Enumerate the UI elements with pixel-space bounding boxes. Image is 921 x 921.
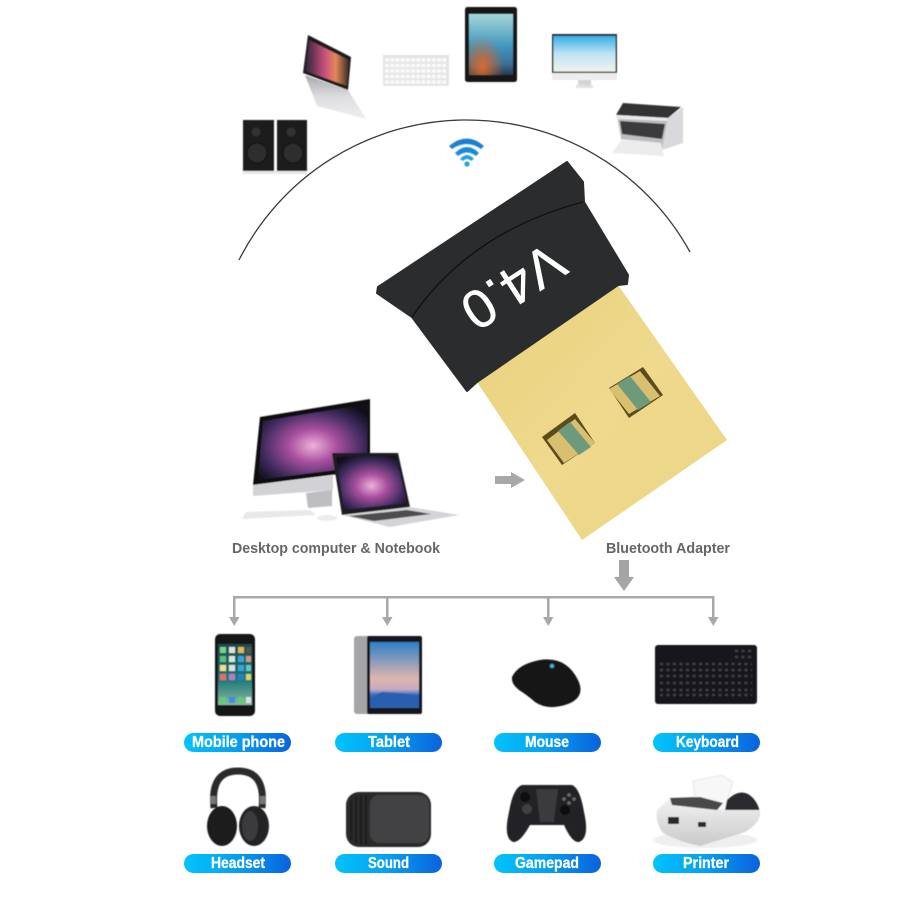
desktop monitor (253, 399, 370, 508)
icon: top printer (612, 103, 683, 156)
device: mobile phone (215, 634, 255, 716)
pill: tablet (335, 733, 442, 752)
pill: mouse: Mouse (525, 734, 569, 751)
icon: speakers (243, 120, 307, 174)
keyboard and mouse (242, 510, 337, 521)
pill: tablet: Tablet (368, 734, 411, 751)
adapter: connector slot left (542, 413, 595, 465)
arrow: computer to adapter (495, 472, 525, 488)
device: mouse (512, 659, 580, 707)
pill: printer (653, 854, 760, 873)
icon: top tablet (465, 7, 517, 82)
pill: gamepad (494, 854, 601, 873)
device: headset (207, 771, 269, 846)
icon: wifi signal (449, 138, 484, 167)
pill: mouse (494, 733, 601, 752)
pill: sound (335, 854, 442, 873)
adapter: version text: V4.0 (450, 231, 576, 341)
pill: headset: Headset (211, 855, 266, 872)
icon: desktop and notebook (242, 399, 459, 527)
device: sound speaker (346, 792, 431, 847)
adapter: black housing (377, 162, 628, 391)
device: tablet (354, 636, 422, 714)
device: portable printer (653, 775, 760, 848)
icon: top monitor (552, 34, 617, 88)
pill: keyboard: Keyboard (676, 734, 739, 751)
adapter: connector slot right (609, 367, 663, 418)
pill: gamepad: Gamepad (515, 855, 579, 872)
icon: top laptop (303, 35, 366, 119)
label: desktop computer and notebook: Desktop computer & Notebook (232, 540, 441, 557)
notebook (332, 453, 459, 527)
pill: headset (184, 854, 291, 873)
device: keyboard (655, 645, 757, 704)
icon: top keyboard (383, 55, 449, 86)
adapter: gold USB connector (477, 285, 727, 540)
pill: keyboard (653, 733, 760, 752)
bluetooth adapter (377, 162, 727, 540)
device: gamepad (507, 785, 586, 842)
arrow: adapter to devices (614, 560, 634, 591)
pill: sound: Sound (368, 855, 409, 872)
arc: wireless range (239, 120, 690, 260)
pill: printer: Printer (683, 855, 729, 872)
connector tree (229, 596, 718, 626)
pill: mobile phone: Mobile phone (192, 734, 285, 751)
label: bluetooth adapter: Bluetooth Adapter (606, 540, 730, 557)
